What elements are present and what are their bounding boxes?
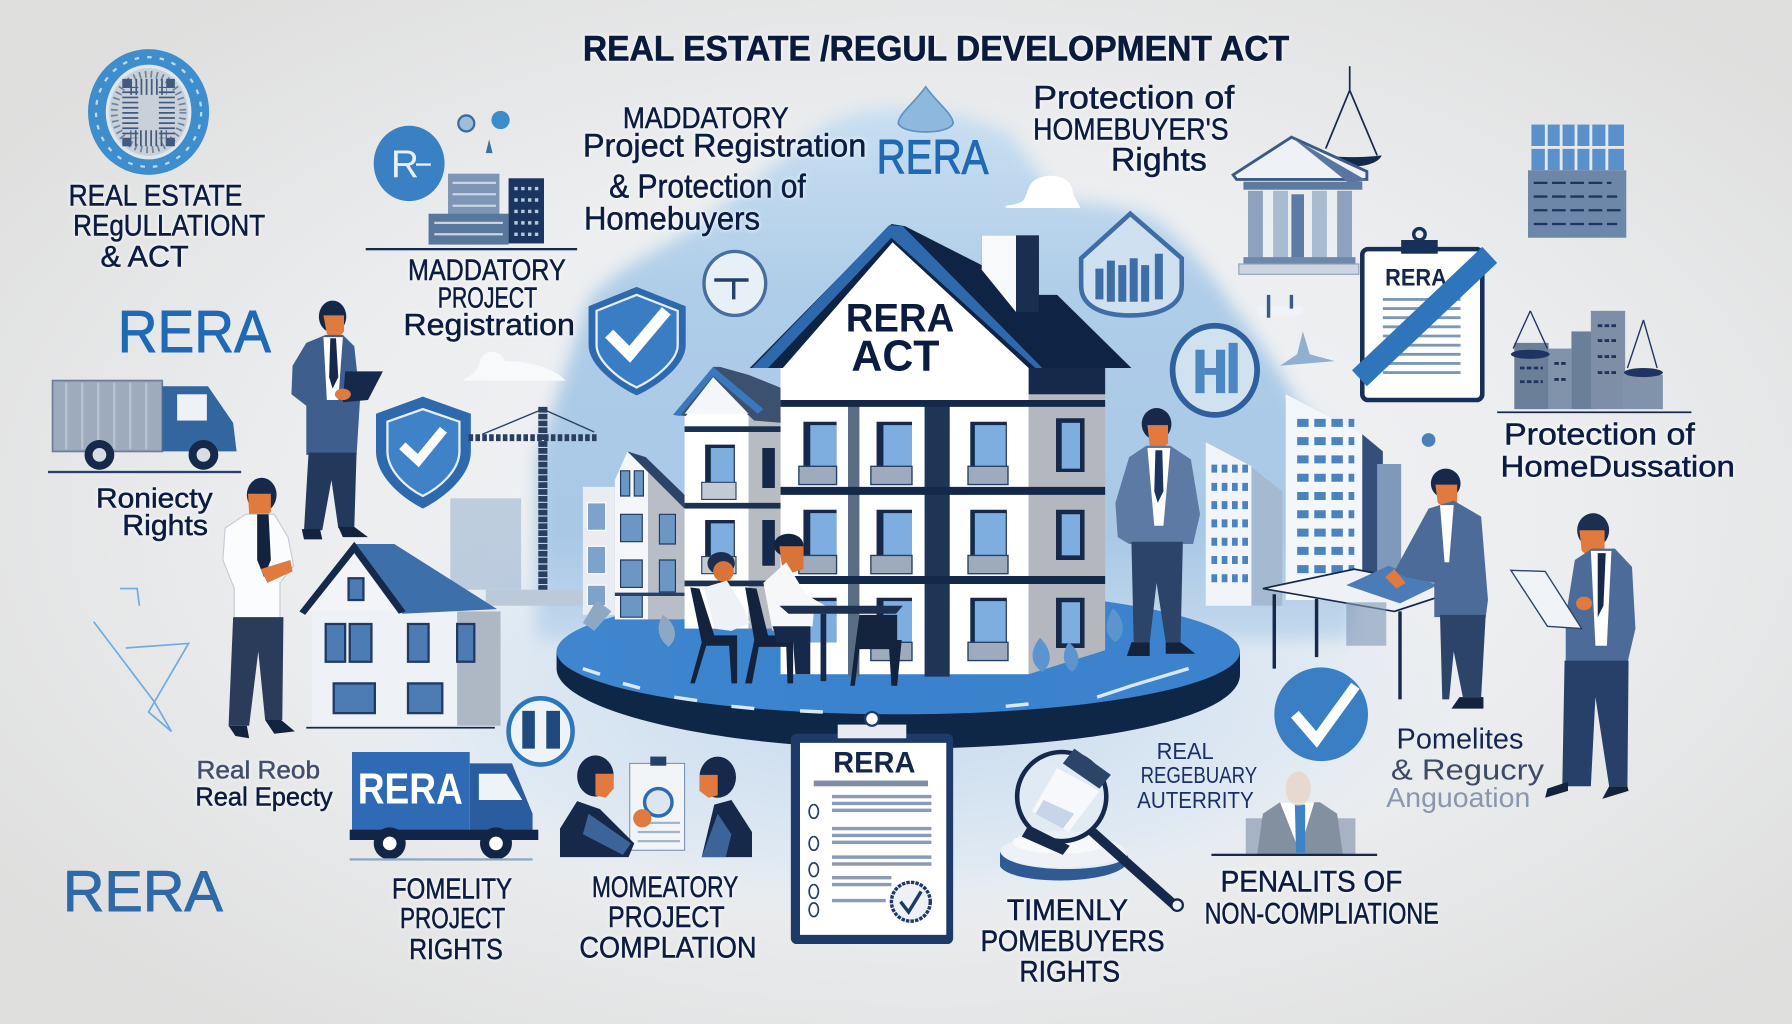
roof — [750, 224, 1131, 368]
text: protection of homebuyers rights: Rights — [1111, 141, 1207, 177]
text: mandatory project completion: MOMEATORY — [592, 871, 738, 904]
text: timely homebuyers rights: RIGHTS — [1019, 956, 1120, 989]
text: penalties and regulatory — [1386, 724, 1545, 813]
icon: house circle badge — [1081, 214, 1182, 315]
text: property rights — [96, 482, 213, 542]
under-eave shadow — [1029, 367, 1105, 394]
text: mandatory project registration: MADDATORY — [408, 254, 566, 287]
text: homebuyer project rights: FOMELITY — [392, 873, 512, 905]
icon: shield lower — [376, 397, 471, 509]
text: timely homebuyers rights: POMEBUYERS — [981, 925, 1165, 958]
text: mandatory project registration: PROJECT — [438, 282, 537, 314]
icon: doors circle — [509, 698, 573, 765]
text: real estate: Real Epecty — [195, 782, 333, 812]
text: penalties of non-compliance: PENALITS OF — [1221, 865, 1402, 898]
text: real estate regulatory authority — [1137, 738, 1257, 813]
text: real estate regulation and act — [69, 180, 265, 273]
text: mandatory project completion: PROJECT — [608, 901, 725, 934]
main house — [750, 224, 1131, 677]
icon: RERA checklist clipboard — [791, 712, 953, 944]
icon: house bottom left — [299, 542, 501, 729]
heading: RERA centre: RERA — [877, 132, 989, 185]
trousers — [773, 626, 810, 674]
text: real estate regulatory authority: AUTERRITY — [1137, 787, 1254, 813]
text: property rights: Roniecty — [96, 482, 213, 513]
icon: R circle — [374, 126, 445, 201]
text: penalties and regulatory: & Regucry — [1391, 754, 1545, 786]
text: real estate regulation and act: REgULLATIONT — [73, 209, 265, 242]
icon: cloud — [1006, 176, 1080, 208]
text: timely homebuyers rights — [981, 894, 1165, 989]
text: mandatory project registration and protection of homebuyers: & Protection of — [609, 169, 806, 206]
gable — [781, 242, 1029, 400]
icon: clipboard with ribbon: RERA — [1385, 265, 1447, 292]
text: protection of home: HomeDussation — [1501, 451, 1735, 484]
icon: official seal — [88, 49, 209, 175]
icon: buildings panel top right — [1528, 125, 1626, 238]
person: man with document — [1511, 513, 1635, 799]
icon: clipboard with ribbon — [1352, 229, 1497, 400]
icon: R circle: R — [391, 143, 419, 186]
icon: small pins — [458, 111, 510, 153]
heading: RERA left: RERA — [118, 298, 271, 365]
platform — [557, 589, 1240, 749]
text: property rights: Rights — [122, 510, 208, 542]
text: mandatory project registration and protection of homebuyers: MADDATORY — [623, 102, 789, 135]
person: man in white shirt — [223, 478, 295, 738]
icon: city with scales — [1497, 311, 1691, 413]
text: mandatory project registration and protection of homebuyers — [583, 102, 866, 237]
text: homebuyer project rights: PROJECT — [400, 903, 505, 935]
trees on platform — [583, 600, 1123, 672]
seated person left — [707, 552, 735, 575]
icon: gavel and magnifier — [1000, 749, 1183, 911]
text: penalties of non-compliance — [1205, 865, 1439, 930]
icon: two men with document — [560, 755, 752, 857]
text: protection of homebuyers rights — [1033, 80, 1234, 177]
text: protection of home: Protection of — [1504, 417, 1695, 452]
icon: delivery truck top left — [48, 381, 241, 473]
window frames — [803, 418, 1085, 648]
person: man with tablet — [291, 301, 383, 539]
text: real estate regulation and act: & ACT — [101, 240, 189, 273]
main house: ACT — [851, 332, 940, 380]
table with blueprints — [1263, 566, 1472, 699]
text: protection of homebuyers rights: Protection of — [1033, 80, 1234, 116]
chimney — [982, 235, 1016, 312]
towers right — [1206, 394, 1401, 606]
text: homebuyer project rights: RIGHTS — [409, 934, 503, 966]
icon: check circle — [1274, 667, 1368, 761]
floor bands — [781, 400, 1105, 584]
text: protection of homebuyers rights: HOMEBUYER'S — [1033, 111, 1229, 146]
table — [779, 606, 903, 614]
window panes — [810, 423, 1080, 643]
seated person right — [774, 534, 803, 557]
person: man in centre — [1115, 408, 1200, 656]
house front wall — [781, 368, 1029, 674]
text: real estate regulatory authority: REGEBUARY — [1141, 762, 1257, 788]
icon: crane — [450, 407, 597, 606]
pillars — [848, 402, 859, 677]
icon: city skyline top — [366, 174, 577, 250]
background blue blob — [297, 108, 1486, 937]
icons: small floating items right — [1257, 295, 1435, 447]
text: penalties and regulatory: Pomelites — [1397, 724, 1523, 756]
small houses left of main — [583, 451, 686, 619]
text: real estate — [195, 756, 333, 812]
icon: small cloud — [463, 352, 566, 381]
text: penalties and regulatory: Anguoation — [1386, 782, 1530, 813]
icon: RERA truck — [350, 752, 538, 861]
icon: person bust — [1211, 771, 1377, 856]
text: mandatory project registration and protection of homebuyers: Project Registration — [583, 128, 866, 164]
text: mandatory project registration and protection of homebuyers: Homebuyers — [584, 201, 760, 237]
icon: RERA truck: RERA — [358, 765, 463, 813]
text: protection of home — [1501, 417, 1735, 484]
heading: RERA bottom left: RERA — [63, 860, 223, 924]
text: mandatory project completion: COMPLATION — [579, 932, 757, 965]
title: REAL ESTATE /REGUL DEVELOPMENT ACT — [583, 29, 1289, 69]
text: timely homebuyers rights: TIMENLY — [1007, 894, 1128, 927]
house label: RERA — [846, 296, 954, 340]
icon: shield top — [589, 287, 686, 395]
text: mandatory project registration — [403, 254, 575, 342]
chairs — [690, 587, 737, 683]
text: real estate regulatory authority: REAL — [1157, 738, 1214, 764]
balconies — [799, 466, 1008, 661]
text: real estate regulation and act: REAL ESTATE — [69, 180, 242, 213]
house left wing — [673, 367, 783, 629]
icon: drop — [898, 87, 953, 132]
people at table — [690, 534, 903, 686]
text: homebuyer project rights — [392, 873, 512, 966]
icon: chart circle badge — [1173, 326, 1257, 415]
roof left edge — [752, 225, 1042, 368]
house side wall — [1029, 392, 1105, 674]
text: mandatory project completion — [579, 871, 757, 965]
text: mandatory project registration: Registration — [403, 307, 575, 342]
text: penalties of non-compliance: NON-COMPLIATIONE — [1205, 897, 1439, 930]
icon: RERA checklist clipboard: RERA — [833, 747, 915, 780]
icon: circle badge — [704, 251, 766, 315]
icon: bank with scale — [1233, 66, 1382, 274]
icon: blue line sketch — [94, 589, 189, 731]
text: real estate: Real Reob — [197, 756, 320, 784]
person: man at table — [1385, 469, 1488, 709]
